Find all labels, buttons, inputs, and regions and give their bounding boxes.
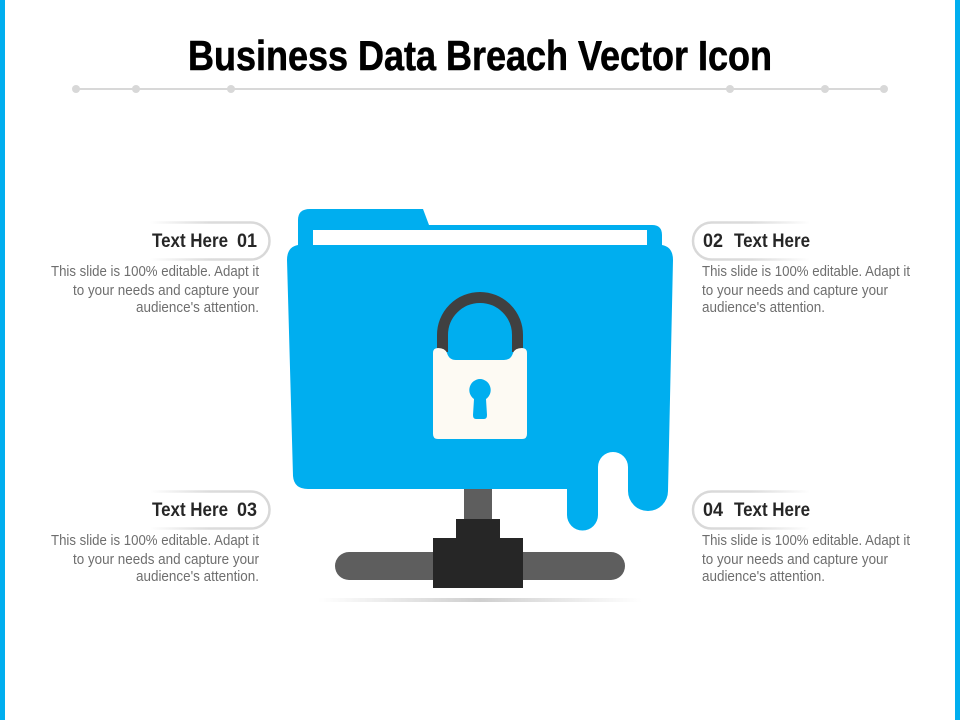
- pill outline: [693, 492, 810, 528]
- body text: to your needs and capture your: [702, 552, 888, 568]
- heading: Text Here: [152, 500, 228, 521]
- body text: audience's attention.: [136, 300, 259, 316]
- body text: [51, 264, 259, 316]
- pill outline: [150, 492, 270, 528]
- heading: 01: [237, 231, 257, 252]
- body text: This slide is 100% editable. Adapt it: [702, 264, 910, 280]
- body text: This slide is 100% editable. Adapt it: [702, 533, 910, 549]
- heading: 02: [703, 231, 723, 252]
- pill outline: [150, 222, 270, 260]
- title: Business Data Breach Vector Icon: [188, 32, 772, 79]
- heading: Text Here: [734, 500, 810, 521]
- heading: 03: [237, 500, 257, 521]
- body text: This slide is 100% editable. Adapt it: [51, 264, 259, 280]
- body text: [702, 533, 910, 585]
- body text: to your needs and capture your: [73, 283, 259, 299]
- body text: [51, 533, 259, 585]
- callout 04: [693, 492, 910, 585]
- paper sheet: [313, 230, 647, 245]
- heading: [703, 231, 810, 252]
- network stand: [335, 485, 625, 588]
- main icon: leaking folder on network stand: [287, 209, 673, 602]
- pill outline: [693, 222, 810, 260]
- body text: This slide is 100% editable. Adapt it: [51, 533, 259, 549]
- body text: to your needs and capture your: [702, 283, 888, 299]
- body text: to your needs and capture your: [73, 552, 259, 568]
- lock body: [433, 348, 527, 439]
- folder front with drips: [287, 245, 673, 530]
- heading: 04: [703, 500, 723, 521]
- body text: [702, 264, 910, 316]
- left border bar: [0, 0, 5, 720]
- folder back with tab: [298, 209, 662, 250]
- padlock: [433, 298, 527, 439]
- callout 01: [51, 222, 270, 316]
- heading: [703, 500, 810, 521]
- callout 02: [693, 222, 910, 316]
- callout 03: [51, 492, 270, 585]
- heading: Text Here: [152, 231, 228, 252]
- ground shadow: [318, 598, 642, 602]
- right border bar: [955, 0, 960, 720]
- body text: audience's attention.: [702, 569, 825, 585]
- body text: audience's attention.: [136, 569, 259, 585]
- keyhole: [469, 379, 491, 419]
- title divider with dots: [72, 85, 888, 93]
- shackle: [442, 298, 518, 352]
- body text: audience's attention.: [702, 300, 825, 316]
- heading: Text Here: [734, 231, 810, 252]
